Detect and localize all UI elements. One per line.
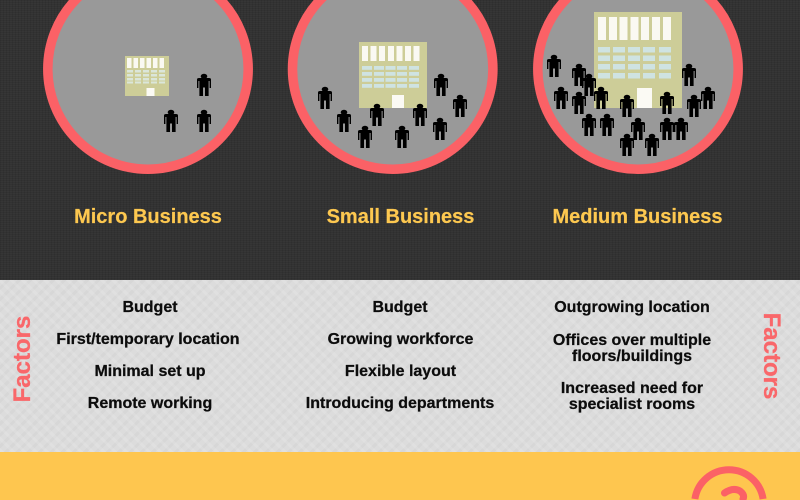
- text: micro factors: First/temporary location: [56, 331, 240, 348]
- text: small factors: Budget: [372, 299, 428, 316]
- text: medium factors: floors/buildings: [572, 348, 692, 365]
- text: medium factors: specialist rooms: [569, 396, 695, 413]
- text: medium factors: Offices over multiple: [553, 332, 711, 349]
- text: medium factors: Increased need for: [561, 380, 703, 397]
- text: small factors: [306, 299, 494, 412]
- side label: factors right: Factors: [758, 313, 784, 399]
- text: small factors: Introducing departments: [306, 395, 494, 412]
- text: small factors: Flexible layout: [345, 363, 456, 380]
- text: micro factors: [56, 299, 240, 412]
- heading: micro business: Micro Business: [74, 206, 222, 228]
- panel: factors band: [0, 280, 800, 452]
- micro business illustration: [48, 0, 248, 169]
- text: micro factors: Minimal set up: [94, 363, 206, 380]
- medium business illustration: [538, 0, 738, 169]
- text: medium factors: Outgrowing location: [554, 299, 710, 316]
- panel: yellow footer: [0, 452, 800, 500]
- heading: medium business: Medium Business: [552, 206, 723, 228]
- text: micro factors: Budget: [122, 299, 178, 316]
- panel: dark background: [0, 0, 800, 280]
- icon: micro building: [125, 56, 169, 96]
- text: micro factors: Remote working: [88, 395, 212, 412]
- heading: small business: Small Business: [327, 206, 474, 228]
- side label: factors left: Factors: [9, 316, 36, 402]
- text: small factors: Growing workforce: [328, 331, 473, 348]
- small business illustration: [292, 0, 493, 169]
- icons: micro people: [164, 74, 211, 132]
- business illustrations: [43, 0, 743, 174]
- icon: small building: [359, 42, 427, 108]
- circle: small: [292, 0, 493, 169]
- circle: medium: [538, 0, 738, 169]
- text: medium factors: [553, 299, 711, 413]
- icons: medium people: [547, 55, 715, 156]
- circle: micro: [48, 0, 248, 169]
- icon: medium building: [594, 12, 682, 108]
- icon: question mark circle: [692, 466, 766, 500]
- icons: small people: [318, 74, 467, 148]
